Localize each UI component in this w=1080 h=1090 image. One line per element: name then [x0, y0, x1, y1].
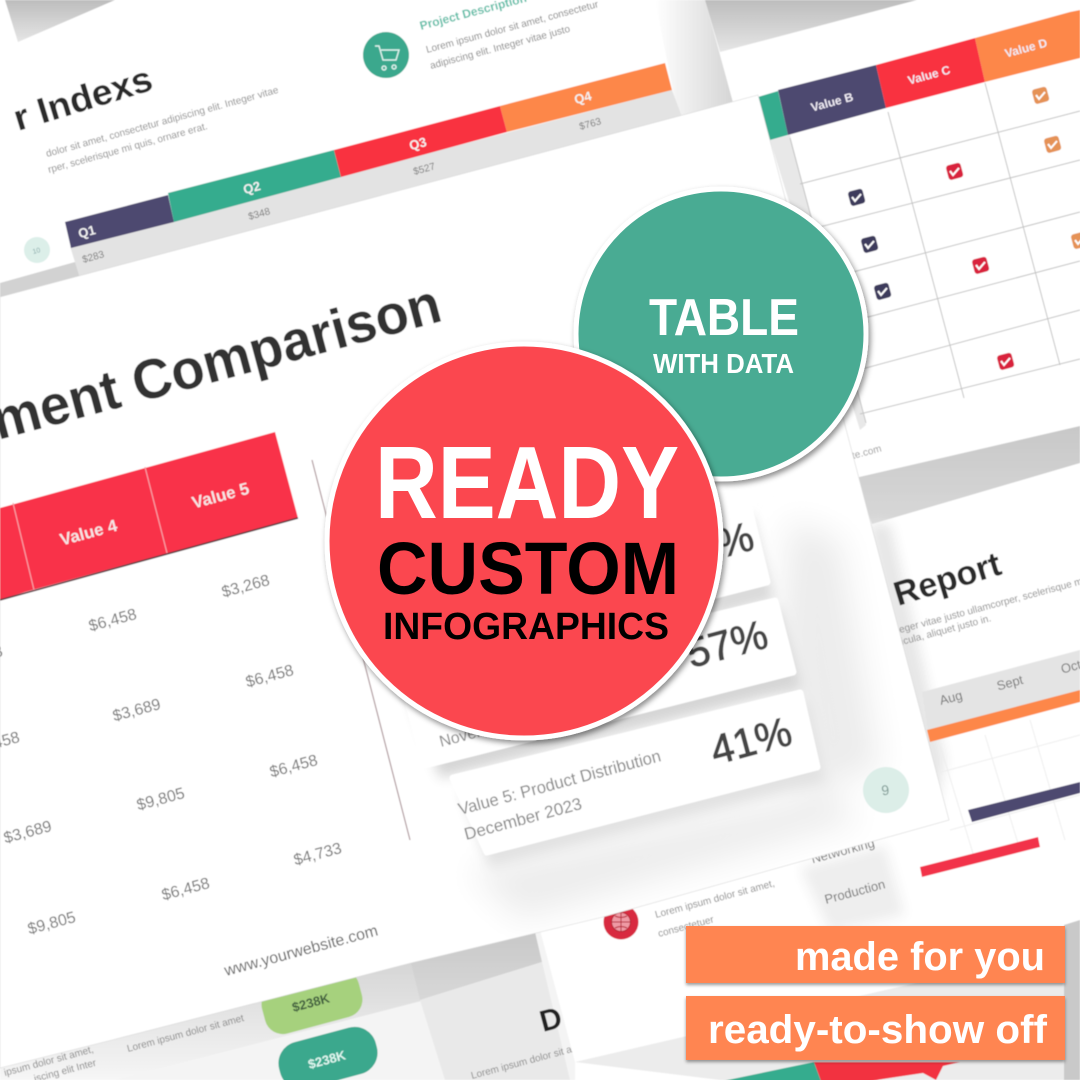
row labels: Networking	[809, 835, 876, 866]
lower slide text: Lorem ipsum dolor sit a	[470, 1044, 574, 1082]
checklist grid	[790, 83, 1080, 423]
slide heading fragment: D	[536, 1001, 566, 1039]
table values: $6,458	[160, 875, 212, 904]
soft panel shading	[470, 520, 880, 920]
month header band	[922, 650, 1080, 732]
report description: icula, aliquet justo in.	[900, 613, 992, 648]
distribution text: Lorem ipsum dolor sit amet,	[654, 878, 776, 921]
gantt orange bar	[927, 690, 1080, 742]
panel: main comparison slide	[0, 95, 949, 1068]
quarterly table: Q1	[77, 222, 97, 241]
quarterly table: Q2	[242, 178, 262, 197]
icon: globe	[604, 904, 638, 940]
quarterly table: $283	[81, 249, 106, 266]
project description text: Lorem ipsum dolor sit amet, consectetur	[425, 0, 600, 56]
month header band: Sept	[995, 672, 1025, 693]
table header: Value 5	[190, 479, 251, 512]
pill: light green price: $238K	[290, 990, 332, 1015]
label: made for you	[686, 926, 1065, 983]
pricing rows text: Lorem ipsum dolor sit amet	[126, 1013, 245, 1055]
table values: $4,733	[292, 840, 344, 869]
percent card 2	[405, 601, 793, 765]
percent card 1: 67%	[667, 513, 759, 579]
table header	[0, 432, 298, 600]
page number badge: 9	[880, 782, 890, 799]
percent card 2: November 2023	[438, 705, 552, 751]
percent card 1	[380, 508, 767, 675]
data table	[0, 432, 344, 938]
footer url: www.yourwebsite.com	[222, 922, 380, 980]
panel: report slide	[855, 426, 1080, 877]
quarterly table: $763	[578, 116, 603, 133]
percent card 3: Value 5: Product Distribution	[456, 746, 663, 819]
icon: shopping cart	[363, 32, 409, 78]
table values: $3,268	[220, 572, 272, 601]
checklist header: Value B	[809, 90, 855, 115]
badge word: infographics: INFOGRAPHICS	[383, 606, 669, 648]
badge word: ready: READY	[375, 425, 679, 540]
page number badge	[863, 767, 909, 813]
quarterly table	[65, 63, 685, 285]
table header: Value 4	[58, 516, 120, 549]
page number badge	[24, 237, 50, 263]
percent card 3: 41%	[705, 708, 797, 774]
badge subheading: WITH DATA	[653, 348, 794, 379]
panel: top-right checklist slide	[705, 0, 1080, 462]
pill: teal price	[278, 1026, 378, 1080]
quarterly table: $527	[412, 161, 437, 178]
percent cards shadow	[385, 515, 826, 868]
table values: $3,689	[2, 818, 54, 847]
label: ready-to-show off	[686, 996, 1065, 1060]
checklist header: Value C	[906, 63, 952, 88]
bottom coloured arrow shapes	[723, 1062, 960, 1081]
label: ready-to-show off: ready-to-show off	[708, 1008, 1048, 1052]
table values: $9,805	[26, 909, 78, 938]
badge: table with data	[576, 189, 866, 479]
table values: $6,458	[244, 662, 296, 691]
month header band: Aug	[938, 687, 964, 708]
vertical divider	[312, 460, 410, 840]
quarterly table: $348	[247, 206, 272, 223]
badge word: custom: CUSTOM	[377, 527, 679, 610]
pricing rows text: iscing elit Inter	[33, 1058, 98, 1085]
table values: $6,458	[268, 752, 320, 781]
distribution text	[654, 880, 775, 937]
label: made for you: made for you	[795, 935, 1045, 979]
report heading: Report	[889, 545, 1006, 614]
row labels: Production	[823, 876, 887, 907]
gantt grid	[947, 720, 1080, 854]
panel: lower slides	[0, 835, 1080, 1090]
quarterly table: Q3	[408, 134, 428, 153]
pill: teal price: $238K	[306, 1047, 348, 1072]
table values: $9,805	[135, 785, 187, 814]
page number badge: 10	[32, 247, 41, 256]
table values: $6,458	[87, 606, 139, 635]
checklist header	[758, 10, 1080, 140]
checklist header: Value D	[1003, 36, 1049, 61]
distribution text: Distribution	[647, 875, 716, 906]
gantt navy bar	[968, 782, 1080, 822]
percent card 2: 57%	[681, 611, 773, 677]
pill: light green price	[261, 977, 363, 1035]
footer url fragment: te.com	[851, 444, 883, 462]
quarterly table: Q4	[573, 88, 594, 107]
row labels	[812, 841, 886, 904]
gantt red bar	[920, 837, 1040, 877]
pricing rows text	[3, 1013, 245, 1085]
slide heading: r Indexs	[8, 58, 157, 139]
slide description: dolor sit amet, consectetur adipiscing elit. Integer vitae	[45, 85, 280, 160]
table values	[0, 572, 344, 938]
badge heading: TABLE	[649, 289, 799, 347]
table values: $3,689	[111, 696, 163, 725]
slide description: rper, scelerisque mi quis, ornare erat.	[47, 121, 209, 176]
badge: ready custom infographics	[327, 344, 721, 738]
percent card 3: December 2023	[462, 794, 584, 844]
project description text: adipiscing elit. Integer vitae justo	[429, 24, 572, 72]
icon: check marks	[847, 86, 1080, 371]
percent card 3	[453, 693, 817, 852]
pricing rows text: ipsum dolor sit amet,	[3, 1044, 95, 1079]
panel: top quarterly slide	[8, 0, 685, 285]
distribution text: consectetuer	[657, 914, 716, 940]
